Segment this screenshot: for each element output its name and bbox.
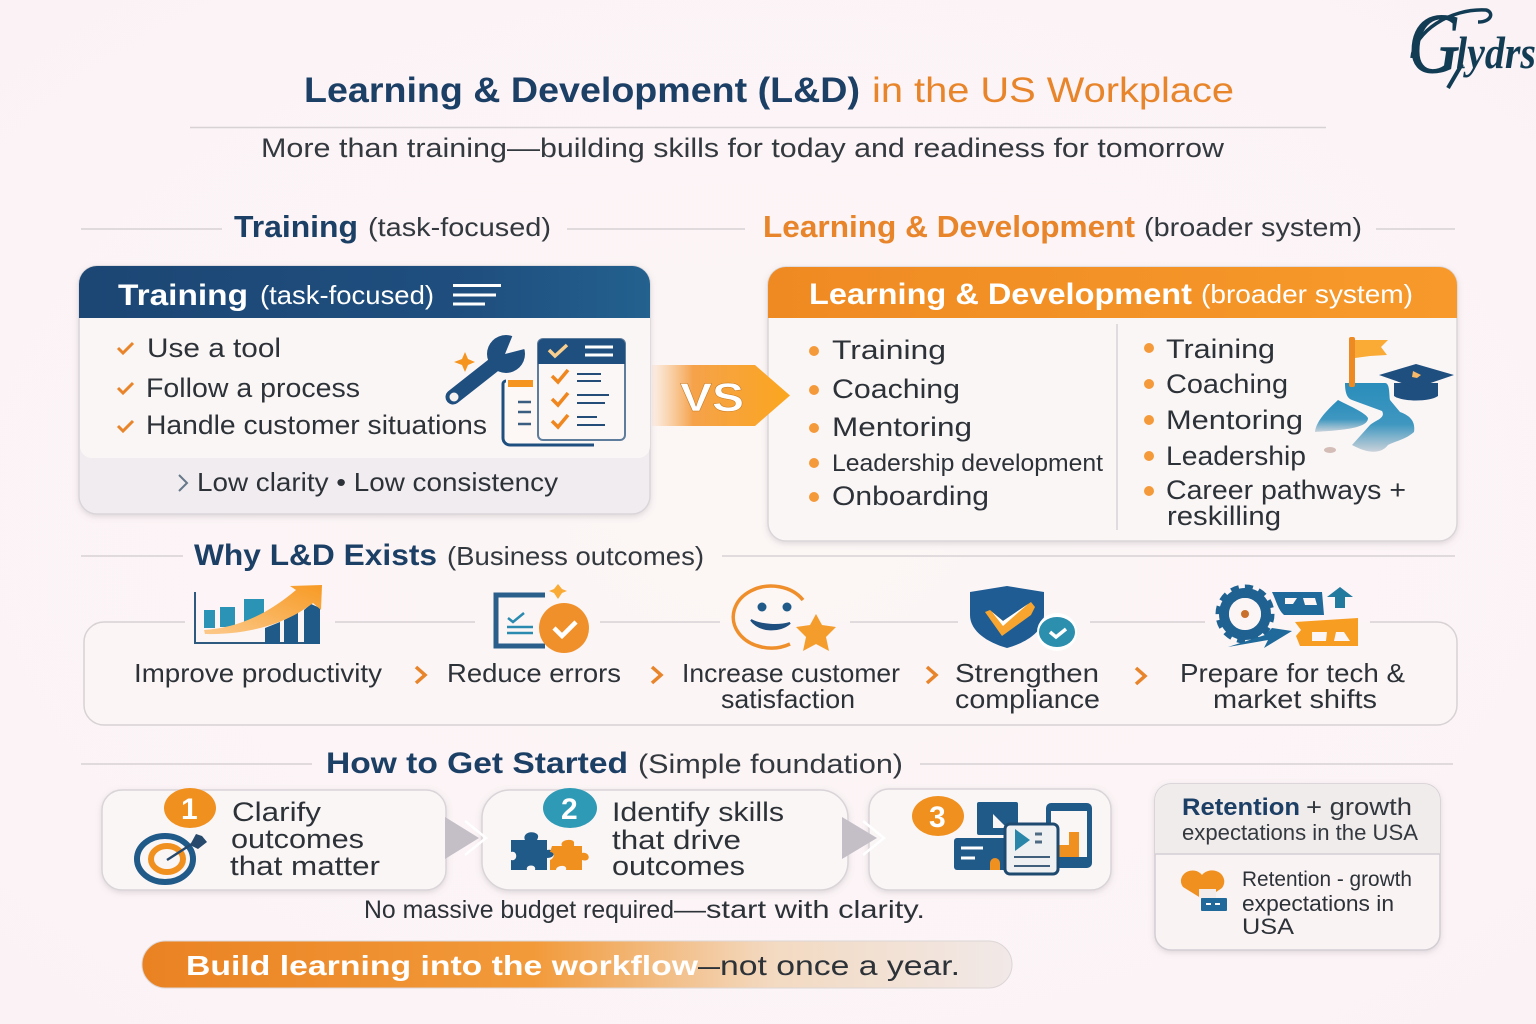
list: left column: Coaching [832, 374, 960, 404]
note: no massive budget: No massive budget required [364, 896, 674, 924]
arrow: VS [652, 365, 790, 426]
label: prepare for tech and market shifts: Prepare for tech & [1180, 658, 1405, 688]
panel: training [79, 266, 650, 514]
list: right column: Coaching [1166, 369, 1288, 399]
retention heading [1182, 794, 1418, 845]
label: prepare for tech and market shifts: market shifts [1213, 684, 1377, 714]
icon: target and dart [137, 834, 207, 882]
list: left column: Onboarding [832, 481, 989, 511]
retention heading: expectations in the USA [1182, 820, 1418, 845]
step text [612, 797, 784, 881]
step text: Clarify [232, 797, 322, 827]
note: no massive budget [364, 896, 925, 924]
retention text: expectations in [1242, 891, 1394, 916]
icon: smiley with star [733, 586, 836, 651]
heading: training [234, 209, 551, 244]
label: increase customer satisfaction: Increase customer [682, 658, 900, 688]
panel: retention [1155, 784, 1440, 950]
arrow: VS: VS [680, 376, 744, 420]
heading: why L&D exists [194, 539, 704, 572]
heading: why L&D exists: (Business outcomes) [447, 541, 704, 571]
arrow: step 1 to 2 [445, 817, 486, 859]
icon: shield with check [970, 586, 1077, 651]
step text [230, 797, 380, 881]
icon: chevron [927, 667, 936, 683]
badge: 3: 3 [929, 801, 946, 834]
icon: gear, signs and arrows [1218, 587, 1358, 648]
panel header: training: Training [118, 279, 248, 312]
list: right column: Mentoring [1166, 405, 1303, 435]
icon: chevron [416, 667, 425, 683]
heading: how to get started: How to Get Started [326, 747, 628, 780]
title: in the US Workplace [872, 71, 1234, 110]
heading: training: Training [234, 209, 358, 244]
label: prepare for tech and market shifts [1180, 658, 1405, 714]
label: reduce errors: Reduce errors [447, 658, 621, 688]
label: strengthen compliance [955, 658, 1100, 714]
badge: 2 [543, 788, 597, 828]
step 2 card [482, 788, 848, 890]
badge: 2: 2 [561, 793, 578, 826]
banner: build learning into the workflow [142, 941, 1012, 988]
step text: that drive [612, 825, 741, 855]
list: right column: Career pathways + [1166, 475, 1406, 505]
banner: build learning into the workflow: Build learning into the workflow [186, 950, 698, 981]
list: left column: Mentoring [832, 412, 972, 442]
heading: why L&D exists: Why L&D Exists [194, 539, 437, 572]
step text: that matter [230, 851, 380, 881]
step 3 card [869, 789, 1111, 890]
heading: learning and development: (broader system) [1144, 212, 1362, 242]
list: right column: Training [1166, 334, 1275, 364]
retention heading: + growth [1306, 794, 1412, 821]
label: strengthen compliance: Strengthen [955, 658, 1099, 688]
label: improve productivity: Improve productivity [134, 658, 382, 688]
badge: 1: 1 [181, 793, 198, 826]
heading: how to get started: (Simple foundation) [638, 749, 903, 779]
list: right column: Leadership [1166, 441, 1306, 471]
label: strengthen compliance: compliance [955, 684, 1100, 714]
icon: chevron [652, 667, 661, 683]
panel: business outcomes [84, 584, 1457, 725]
banner: build learning into the workflow: not once a year. [720, 950, 960, 981]
arrow: step 2 to 3 [842, 817, 884, 859]
logo: Glydrs [1408, 0, 1536, 91]
retention text: USA [1242, 914, 1294, 939]
step text: outcomes [231, 824, 364, 854]
icon: heart and briefcase [1181, 870, 1227, 911]
checklist: Use a tool [147, 333, 281, 363]
panel header: learning and development [768, 267, 1457, 318]
checklist [118, 333, 487, 440]
checklist: Handle customer situations [146, 410, 487, 440]
footer: low clarity: Low clarity • Low consistency [197, 467, 558, 497]
subtitle: building skills for today and readiness for tomorrow [540, 133, 1225, 163]
badge: 1 [164, 788, 216, 828]
heading: how to get started [326, 747, 903, 780]
retention heading: Retention [1182, 794, 1300, 821]
list: right column [1144, 334, 1406, 531]
checklist: Follow a process [146, 373, 360, 403]
icon: reduce errors [496, 584, 589, 653]
list: left column: Training [832, 335, 946, 365]
panel header: training [79, 266, 650, 318]
heading: learning and development: Learning & Development [763, 209, 1135, 244]
icon: growth chart [195, 585, 322, 644]
badge: 3 [912, 796, 964, 836]
subtitle [261, 133, 1225, 163]
icon: puzzle pieces [511, 832, 589, 870]
title [304, 71, 1234, 110]
subtitle: — [507, 133, 540, 163]
icon: chevron [1136, 668, 1145, 684]
banner: build learning into the workflow: — [698, 950, 720, 981]
subtitle: More than training [261, 133, 507, 163]
list: right column: reskilling [1167, 501, 1281, 531]
icon: wrench and checklist [450, 332, 625, 446]
heading: learning and development [763, 209, 1362, 244]
icon: digital learning devices [954, 802, 1092, 874]
panel header: learning and development: Learning & Development [809, 278, 1192, 311]
heading: training: (task-focused) [368, 212, 551, 242]
retention text: Retention - growth [1242, 868, 1412, 891]
label: increase customer satisfaction [682, 658, 900, 714]
title: Learning & Development (L&D) [304, 71, 860, 110]
panel header: learning and development: (broader system) [1201, 279, 1413, 309]
icon: flag, path and graduation cap [1315, 337, 1454, 453]
step 1 card [102, 788, 446, 890]
panel header: training: (task-focused) [260, 280, 434, 310]
step text: outcomes [612, 851, 745, 881]
note: no massive budget: — [674, 896, 706, 924]
list: left column: Leadership development [832, 450, 1103, 477]
list: left column [809, 335, 1103, 511]
panel: learning and development [768, 267, 1457, 541]
step text: Identify skills [612, 797, 784, 827]
note: no massive budget: start with clarity. [706, 896, 925, 924]
retention text [1242, 868, 1412, 939]
label: increase customer satisfaction: satisfaction [721, 684, 855, 714]
